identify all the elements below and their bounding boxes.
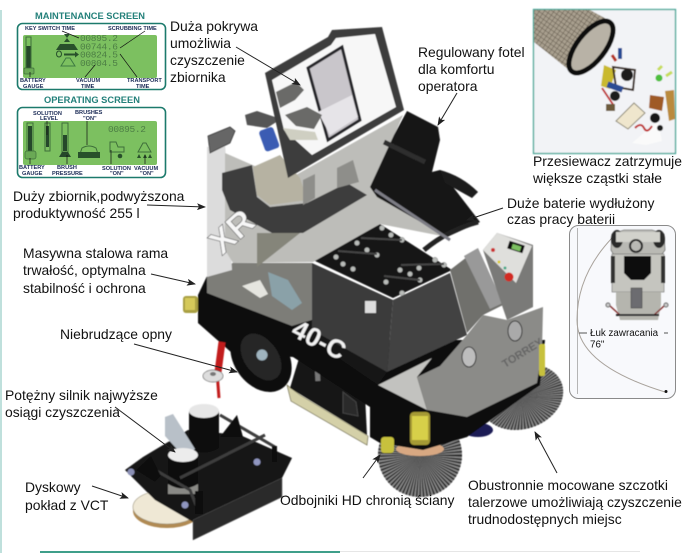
leader lines: operating screen bbox=[30, 121, 145, 164]
arrow: deck bbox=[92, 486, 128, 498]
LCD display: operating bbox=[23, 121, 157, 165]
text: side brushes: trudnodostępnych miejsc bbox=[468, 511, 622, 527]
arc path bbox=[577, 238, 665, 392]
text: frame: trwałość, optymalna bbox=[23, 262, 146, 278]
translucent tank bbox=[207, 111, 447, 277]
text: lid: Duża pokrywa bbox=[170, 18, 258, 34]
console bbox=[483, 233, 533, 320]
arrow: frame bbox=[151, 274, 195, 284]
text: frame: Masywna stalowa rama bbox=[23, 245, 168, 261]
arrow: lid bbox=[236, 47, 300, 85]
readouts: hours: 00744.6 bbox=[80, 42, 118, 52]
arrow: batteries bbox=[467, 208, 503, 220]
text: side brushes: talerzowe umożliwiają czyszczenie bbox=[468, 494, 682, 510]
icons: brushes, solution, vacuum bbox=[78, 142, 152, 158]
frame handle bars bbox=[150, 415, 275, 510]
dimension ticks bbox=[579, 332, 668, 334]
small pivot wheel bbox=[203, 370, 223, 398]
labels: maintenance screen bbox=[20, 26, 162, 90]
labels: operating screen: "ON" bbox=[140, 171, 154, 177]
text: lid: umożliwia bbox=[170, 35, 231, 51]
LCD display: maintenance bbox=[23, 35, 157, 78]
tank body bbox=[225, 115, 447, 263]
arrow: motor bbox=[115, 407, 175, 452]
turning radius label: 76" bbox=[590, 340, 605, 350]
lower translucent strip bbox=[292, 320, 387, 385]
photo: strainer with debris bbox=[534, 10, 676, 154]
icon: gauges bbox=[25, 123, 71, 159]
labels: operating screen: SOLUTION bbox=[33, 111, 62, 117]
text: frame: stabilność i ochrona bbox=[23, 280, 146, 296]
battery terminals bbox=[333, 225, 447, 296]
tank columns bbox=[303, 160, 359, 205]
arrow: tires bbox=[134, 344, 237, 372]
battery compartment: right face bbox=[387, 273, 467, 372]
text: motor: Potężny silnik najwyższe bbox=[5, 387, 158, 403]
Torrey logo: TORREY bbox=[500, 336, 546, 371]
rear motor bbox=[189, 404, 219, 452]
left page edge bbox=[0, 10, 2, 553]
front motor bbox=[168, 448, 198, 494]
blue bolts bbox=[128, 468, 134, 476]
bracket bbox=[165, 414, 195, 458]
dark band bbox=[222, 165, 367, 233]
panel: operating screen bbox=[18, 108, 166, 178]
deck plate bbox=[125, 430, 292, 522]
labels: operating screen: PRESSURE bbox=[52, 171, 83, 177]
operator seat bbox=[370, 111, 480, 237]
text: deck: Dyskowy bbox=[25, 479, 81, 495]
labels: operating screen: "ON" bbox=[110, 171, 124, 177]
frame brackets bbox=[136, 415, 277, 514]
icon: battery gauge bbox=[24, 37, 34, 74]
arrow: side brushes bbox=[535, 432, 557, 473]
icons: timers bbox=[56, 34, 79, 66]
labels: maintenance screen: BATTERY bbox=[20, 78, 46, 84]
labels: maintenance screen: SCRUBBING TIME bbox=[108, 26, 157, 32]
text: lid: zbiornika bbox=[170, 69, 226, 85]
debris bbox=[601, 48, 675, 145]
labels: operating screen: SOLUTION bbox=[102, 166, 131, 172]
text: bumpers: Odbojniki HD chronią ściany bbox=[280, 492, 455, 508]
lower center bbox=[257, 233, 300, 267]
bottom rule bbox=[40, 551, 340, 553]
speckled upright cover bbox=[450, 250, 503, 333]
labels: operating screen: BRUSHES bbox=[75, 110, 103, 116]
steering wheel bbox=[424, 222, 478, 250]
panel: maintenance screen bbox=[18, 24, 166, 90]
arrow: bumpers bbox=[363, 455, 380, 478]
text: batteries: czas pracy baterii bbox=[507, 211, 615, 227]
lid window bbox=[308, 47, 360, 140]
text: tires: Niebrudzące opny bbox=[60, 326, 172, 342]
battery connector bars bbox=[338, 238, 444, 280]
dark inlet bbox=[245, 111, 281, 128]
cleaning deck assembly bbox=[125, 404, 292, 540]
water bottle detail bbox=[268, 272, 302, 310]
model badge 40-C: 40-C bbox=[287, 314, 351, 366]
labels: operating screen: "ON" bbox=[83, 116, 97, 122]
heading: maintenance screen: MAINTENANCE SCREEN bbox=[35, 11, 145, 21]
front blade bbox=[193, 478, 282, 540]
turning radius label: Łuk zawracania bbox=[590, 328, 659, 339]
text: tank: Duży zbiornik,podwyższona bbox=[13, 188, 185, 204]
battery compartment: top bbox=[313, 224, 452, 298]
text: seat: operatora bbox=[418, 78, 478, 94]
deck tray bbox=[207, 263, 312, 326]
labels: operating screen: LEVEL bbox=[40, 116, 59, 122]
arrow: tank bbox=[147, 205, 205, 207]
tank lid bbox=[265, 27, 404, 178]
mesh basket bbox=[534, 10, 612, 74]
beige funnel bbox=[253, 155, 307, 205]
leader lines: maintenance screen bbox=[30, 31, 145, 77]
labels: maintenance screen: VACUUM bbox=[76, 78, 100, 84]
readout: hours: 00895.2 bbox=[108, 124, 146, 135]
front gray cowling bbox=[417, 307, 543, 417]
side brush: front bbox=[378, 413, 462, 497]
XR logo: XR bbox=[202, 202, 262, 262]
readouts: hours: 00895.2 bbox=[80, 33, 118, 44]
text: seat: dla komfortu bbox=[418, 61, 494, 77]
labels: maintenance screen: TIME bbox=[136, 84, 150, 90]
tank handle bbox=[208, 127, 235, 153]
light deck corner bbox=[378, 358, 432, 410]
yellow bumper rollers bbox=[183, 296, 545, 453]
text: side brushes: Obustronnie mocowane szczotki bbox=[468, 477, 668, 493]
readouts: hours: 00824.5 bbox=[80, 50, 118, 60]
labels: maintenance screen: KEY SWITCH TIME bbox=[25, 26, 75, 32]
text: lid: czyszczenie bbox=[170, 52, 245, 68]
labels: operating screen: GAUGE bbox=[22, 171, 43, 177]
pad driver disc bbox=[133, 490, 201, 528]
text: deck: pokład z VCT bbox=[25, 497, 109, 513]
cowling holes bbox=[462, 347, 476, 367]
machine top view bbox=[606, 230, 668, 320]
left wall bbox=[207, 142, 232, 277]
labels: maintenance screen: GAUGE bbox=[23, 84, 44, 90]
labels: operating screen: BRUSH bbox=[57, 165, 77, 171]
readouts: hours: 00804.5 bbox=[80, 58, 118, 69]
status plate bbox=[365, 301, 376, 313]
labels: operating screen: VACUUM bbox=[134, 166, 158, 172]
battery compartment: left face bbox=[312, 263, 393, 372]
text: batteries: Duże baterie wydłużony bbox=[507, 195, 655, 211]
labels: operating screen bbox=[19, 110, 158, 177]
basket ring bbox=[561, 14, 621, 80]
text: tank: produktywność 255 l bbox=[13, 205, 140, 221]
text: motor: osiągi czyszczenia bbox=[5, 404, 120, 420]
side brush: right bbox=[472, 354, 572, 440]
black chassis bbox=[198, 263, 545, 450]
text: strainer: większe cząstki stałe bbox=[532, 170, 662, 186]
drive wheel bbox=[218, 312, 304, 404]
labels: maintenance screen: TIME bbox=[81, 84, 95, 90]
handles behind lid bbox=[276, 82, 322, 129]
arrow: seat bbox=[438, 93, 457, 125]
labels: maintenance screen: TRANSPORT bbox=[127, 78, 162, 84]
blue filter bbox=[258, 126, 280, 152]
machine: main scrubber bbox=[183, 27, 572, 497]
panel: turning radius diagram bbox=[570, 226, 676, 398]
labels: operating screen: BATTERY bbox=[19, 165, 45, 171]
blue brush hub bbox=[463, 423, 493, 437]
heading: operating screen: OPERATING SCREEN bbox=[44, 95, 140, 105]
text: seat: Regulowany fotel bbox=[418, 44, 525, 60]
readouts: hours bbox=[80, 33, 118, 69]
text: strainer: Przesiewacz zatrzymuje bbox=[533, 153, 682, 169]
squeegee assembly bbox=[287, 355, 368, 445]
